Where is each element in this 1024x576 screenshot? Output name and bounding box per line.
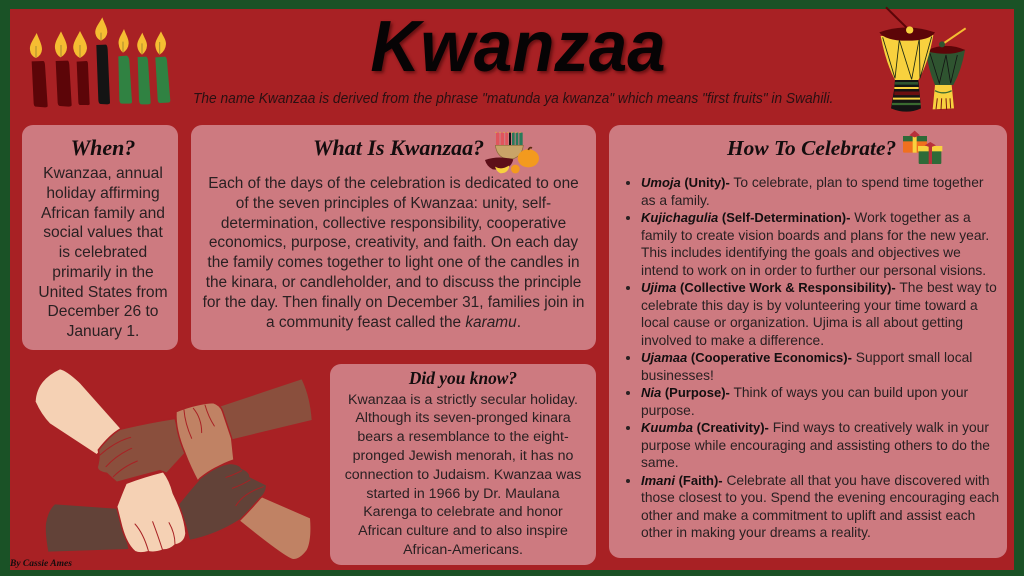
- panel: did you know: [330, 364, 596, 565]
- text: when: January 1.: [67, 323, 139, 340]
- list: principles: purpose while encouraging and assisting others to do the: [641, 438, 990, 453]
- list: principles: Kujichagulia (Self-Determination)- Work together as a: [641, 210, 971, 225]
- large yellow drum: [879, 26, 935, 112]
- icon: drums: [880, 6, 966, 112]
- list: principles: This includes identifying the goals and objectives we: [641, 245, 961, 260]
- panel: when: [22, 125, 178, 350]
- text: did you know: African culture and to also inspire: [358, 523, 568, 539]
- heading: when: When?: [71, 135, 135, 160]
- text: what is kwanzaa: the family comes together to light one of the candles in: [207, 254, 580, 271]
- text: what is kwanzaa: a community feast called the karamu.: [266, 314, 521, 331]
- list: principles: Imani (Faith)- Celebrate all that you have discovered with: [641, 473, 990, 488]
- list: principles: Nia (Purpose)- Think of ways you can build upon your: [641, 385, 968, 400]
- small green drum: [926, 41, 965, 110]
- list: principles: local cause or organization. Ujima is all about getting: [641, 315, 963, 330]
- list: principles: same.: [641, 455, 679, 470]
- heading: how to celebrate: How To Celebrate?: [727, 136, 896, 160]
- credit: By Cassie Ames: [10, 559, 72, 569]
- panel: how to celebrate: [609, 125, 1007, 558]
- text: did you know: African-Americans.: [403, 542, 523, 558]
- drumsticks: [886, 7, 966, 44]
- list: principles: as a family.: [641, 193, 710, 208]
- arms: [36, 369, 312, 559]
- text: did you know: Karenga to celebrate and honor: [363, 504, 563, 520]
- title: Kwanzaa: [370, 6, 666, 87]
- list: principles: those closest to you. Spend the evening encouraging each: [641, 490, 999, 505]
- text: when: holiday affirming: [46, 185, 160, 202]
- list: principles: celebrate this day is by volunteering your time toward a: [641, 298, 978, 313]
- text: did you know: connection to Judaism. Kwanzaa was: [345, 467, 581, 483]
- list: principles: Ujamaa (Cooperative Economics)- Support small local: [641, 350, 972, 365]
- text: what is kwanzaa: determination, collective responsibility, cooperative: [221, 215, 566, 232]
- text: what is kwanzaa: of the seven principles of Kwanzaa: unity, self-: [236, 195, 551, 212]
- text: did you know: bears a resemblance to the eight-: [357, 429, 569, 445]
- text: what is kwanzaa: the kinara, or candleholder, and to discuss the principle: [206, 274, 581, 291]
- subtitle: The name Kwanzaa is derived from the phrase "matunda ya kwanza" which means "first fruits" in Swahili.: [193, 90, 833, 107]
- list: principles: Ujima (Collective Work & Responsibility)- The best way to: [641, 280, 997, 295]
- list: principles: Kuumba (Creativity)- Find ways to creatively walk in your: [641, 420, 989, 435]
- list: principles: Umoja (Unity)- To celebrate, plan to spend time together: [641, 175, 983, 190]
- text: when: United States from: [38, 284, 168, 300]
- icon: kinara candles: [30, 18, 170, 108]
- icon: gift boxes: [903, 130, 942, 164]
- panel: what is kwanzaa: [191, 125, 596, 350]
- list: principles: family to create vision boards and plans for the new year.: [641, 228, 989, 243]
- list: principles: intend to work on in order to further our personal visions.: [641, 263, 986, 278]
- list: principles: involved to make a difference.: [641, 333, 824, 348]
- text: did you know: Although its seven-pronged kinara: [355, 410, 571, 426]
- heading: what is kwanzaa: What Is Kwanzaa?: [313, 135, 484, 160]
- text: when: December 26 to: [48, 303, 158, 320]
- illustration: linked hands: [36, 369, 312, 559]
- text: did you know: [345, 392, 581, 558]
- text: when: is celebrated: [59, 244, 147, 261]
- text: did you know: Kwanzaa is a strictly secular holiday.: [348, 392, 578, 408]
- list: principles: purpose.: [641, 403, 695, 418]
- list: principles: [626, 175, 999, 540]
- text: when: African family and: [41, 204, 165, 222]
- icon: kinara and pumpkin: [485, 132, 539, 174]
- finger lines: [100, 405, 263, 551]
- heading: did you know: Did you know?: [409, 368, 517, 388]
- list: principles: other in making your dreams a reality.: [641, 525, 871, 540]
- text: when: Kwanzaa, annual: [43, 165, 163, 182]
- text: what is kwanzaa: for the day. Then finally on December 31, families join in: [203, 294, 584, 311]
- text: when: [38, 165, 168, 340]
- text: did you know: started in 1966 by Dr. Maulana: [366, 486, 560, 502]
- text: what is kwanzaa: Each of the days of the celebration is dedicated to one: [208, 175, 579, 192]
- text: when: primarily in the: [52, 264, 154, 281]
- text: did you know: pronged Jewish menorah, it has no: [353, 448, 573, 464]
- text: what is kwanzaa: economics, purpose, creativity, and faith. On each day: [209, 234, 578, 251]
- hands: [97, 403, 267, 553]
- list: principles: other and make a commitment to uplift and assist each: [641, 508, 975, 523]
- text: what is kwanzaa: [202, 175, 584, 331]
- text: when: social values that: [43, 224, 163, 241]
- list: principles: businesses!: [641, 368, 714, 383]
